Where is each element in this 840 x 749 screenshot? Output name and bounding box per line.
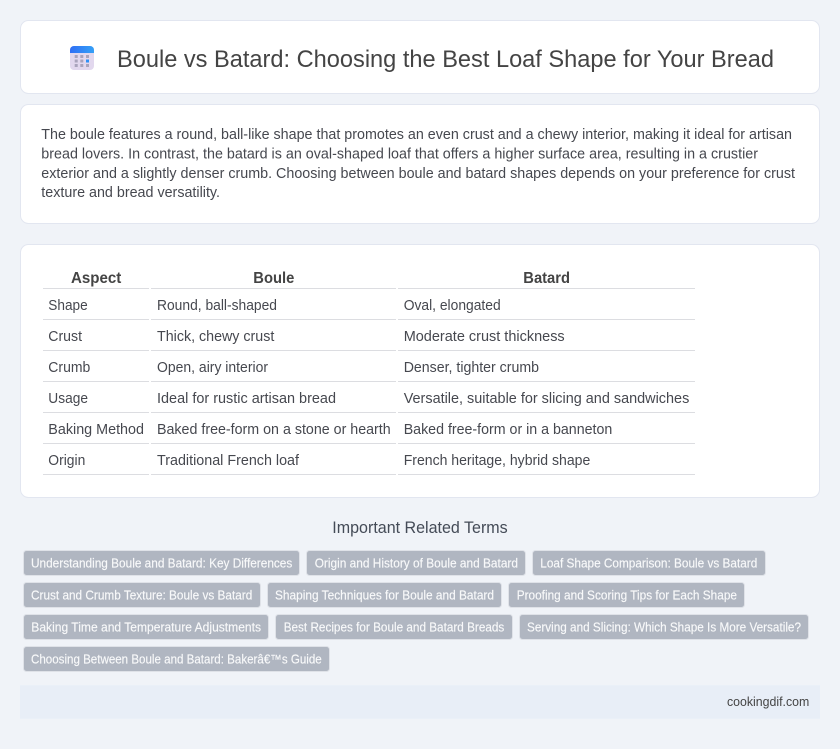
- table row: usage: [48, 391, 689, 407]
- table row: baking method: Baking Method: [48, 422, 144, 438]
- table row: origin: Origin: [48, 453, 85, 469]
- tag labels: Baking Time and Temperature Adjustments: [31, 620, 261, 634]
- icon: calendar grid: [70, 46, 94, 70]
- table header row: Boule: [253, 270, 294, 287]
- panel: comparison table: [20, 244, 820, 498]
- table row: crust: Crust: [48, 329, 82, 345]
- tag labels: Proofing and Scoring Tips for Each Shape: [517, 588, 737, 602]
- table row: baking method: [48, 422, 612, 438]
- tag labels: Origin and History of Boule and Batard: [315, 556, 518, 570]
- text block: paragraph: texture and bread versatility.: [41, 185, 220, 201]
- title: Boule vs Batard: Choosing the Best Loaf Shape for Your Bread: [117, 46, 774, 73]
- table header row: [71, 270, 570, 287]
- tag labels: [31, 556, 801, 666]
- tag labels: Serving and Slicing: Which Shape Is More Versatile?: [527, 620, 801, 634]
- table header row: Batard: [523, 270, 570, 287]
- footer source text: cookingdif.com: [727, 694, 809, 709]
- panel: intro paragraph: [20, 104, 820, 224]
- table row: crumb: Crumb: [48, 360, 90, 376]
- tag labels: Shaping Techniques for Boule and Batard: [275, 588, 494, 602]
- text block: paragraph: [41, 127, 795, 201]
- table row: crust: [48, 329, 565, 345]
- table row: origin: Traditional French loaf: [157, 453, 300, 469]
- table row: crust: Moderate crust thickness: [404, 329, 565, 345]
- table row: shape: Oval, elongated: [404, 298, 501, 314]
- footer bar: [20, 685, 820, 719]
- text block: paragraph: bread lovers. In contrast, the batard is an oval-shaped loaf that offers a higher surface area, resulting in a crustier: [41, 146, 758, 162]
- table row: origin: [48, 453, 590, 469]
- tag labels: Understanding Boule and Batard: Key Differences: [31, 556, 292, 570]
- panel: title header: [20, 20, 820, 94]
- table row: usage: Ideal for rustic artisan bread: [157, 391, 336, 407]
- panel: related term tags: [24, 550, 808, 672]
- table row: crumb: Denser, tighter crumb: [404, 360, 539, 376]
- tag labels: Crust and Crumb Texture: Boule vs Batard: [31, 588, 252, 602]
- text block: paragraph: The boule features a round, ball-like shape that promotes an even crust and a chewy interior, making it ideal for artisan: [41, 127, 792, 143]
- table row: usage: Versatile, suitable for slicing and sandwiches: [404, 391, 689, 407]
- table row: baking method: Baked free-form or in a banneton: [404, 422, 612, 438]
- heading: important related terms: Important Related Terms: [332, 519, 508, 537]
- table row: origin: French heritage, hybrid shape: [404, 453, 590, 469]
- table header row: Aspect: [71, 270, 122, 287]
- table row: shape: [48, 298, 501, 314]
- tag labels: Choosing Between Boule and Batard: Bakerâ€™s Guide: [31, 652, 322, 666]
- table row: shape: Round, ball-shaped: [157, 298, 277, 314]
- tag labels: Loaf Shape Comparison: Boule vs Batard: [540, 556, 757, 570]
- tag labels: Best Recipes for Boule and Batard Breads: [284, 620, 504, 634]
- table row: crust: Thick, chewy crust: [157, 329, 274, 345]
- table row: crumb: [48, 360, 539, 376]
- table row: usage: Usage: [48, 391, 88, 407]
- text block: paragraph: exterior and a slightly denser crumb. Choosing between boule and batard shapes depends on your preference for crust: [41, 166, 795, 182]
- table row: crumb: Open, airy interior: [157, 360, 268, 376]
- table row: shape: Shape: [48, 298, 88, 314]
- table row: baking method: Baked free-form on a stone or hearth: [157, 422, 391, 438]
